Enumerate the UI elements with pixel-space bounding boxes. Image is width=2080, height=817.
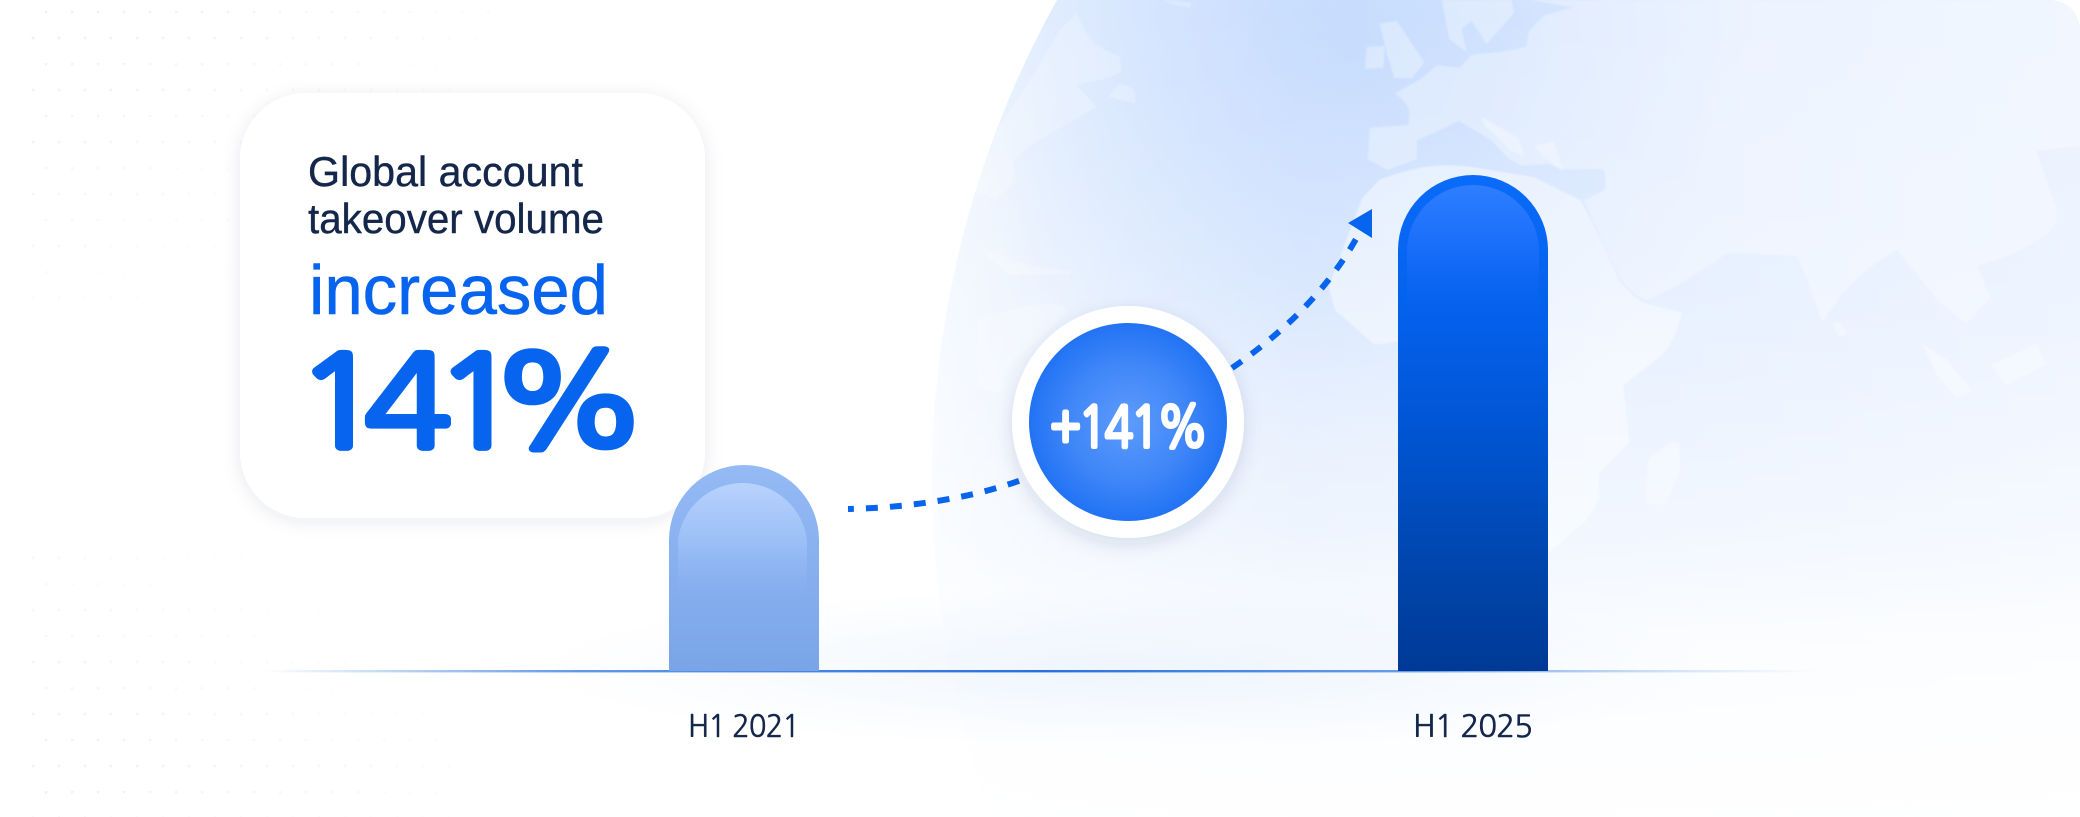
icon: arrowhead xyxy=(1348,209,1372,238)
background dot pattern xyxy=(32,11,1526,817)
globe with world map xyxy=(900,0,2080,817)
floor glow xyxy=(530,588,1730,748)
heading line: takeover volume: takeover volume xyxy=(308,195,604,242)
panel: headline card xyxy=(240,93,705,518)
callout: +141% badge xyxy=(1012,306,1244,538)
heading line: increased: increased xyxy=(309,251,608,329)
badge value: +141% xyxy=(1050,400,1206,456)
chart baseline xyxy=(265,670,1820,672)
heading line: Global account: Global account xyxy=(308,148,583,195)
bar: H1 2025 xyxy=(1398,175,1548,671)
bar: H1 2021 xyxy=(669,465,819,671)
big number: 141%: 141% xyxy=(296,339,648,466)
axis label: H1 2021: H1 2021 xyxy=(688,711,799,742)
arrow: dashed growth curve xyxy=(848,209,1372,509)
map: americas landmass xyxy=(1110,1,1190,102)
map: europe, africa and asia landmasses xyxy=(1329,0,1820,450)
map fade xyxy=(938,292,2080,817)
axis label: H1 2025: H1 2025 xyxy=(1413,711,1532,742)
